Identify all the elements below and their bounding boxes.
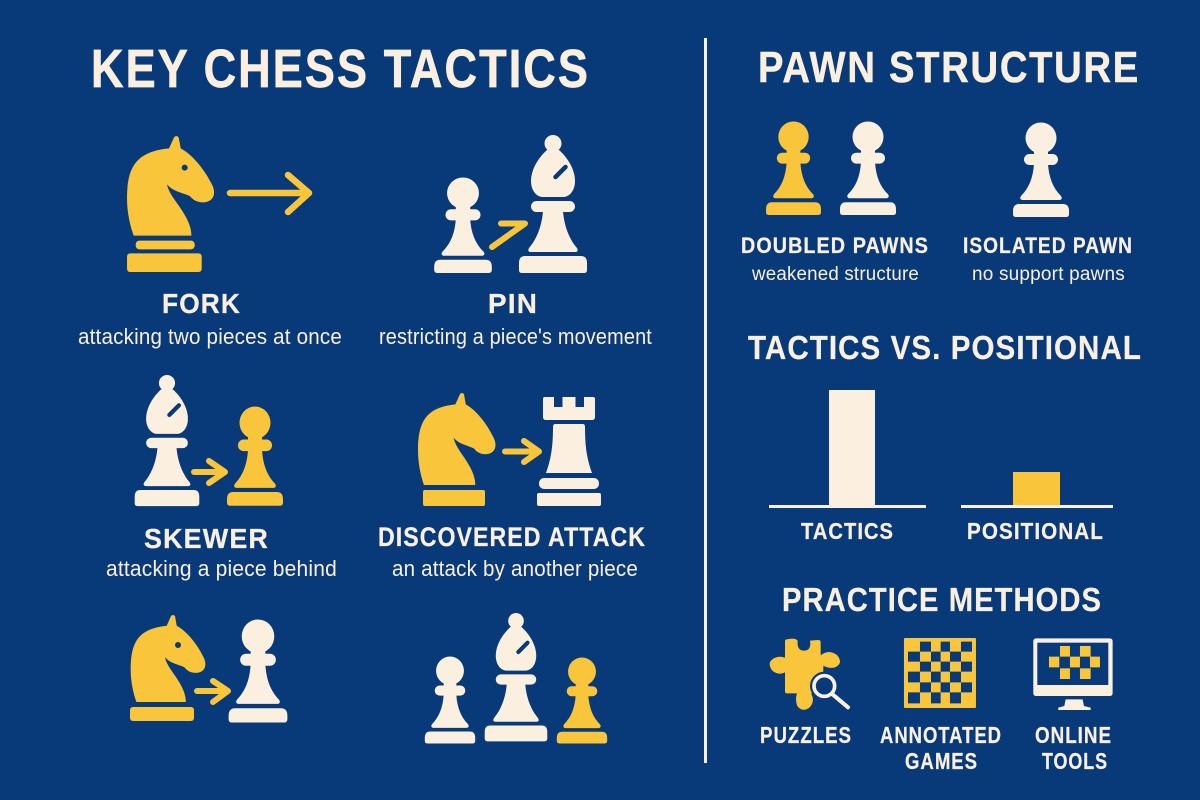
label: online tools: TOOLS <box>1042 748 1108 774</box>
divider <box>704 38 707 763</box>
label: tactics: TACTICS <box>801 518 894 544</box>
panel: skewer <box>106 375 337 581</box>
label: online tools <box>1035 722 1112 774</box>
label: annotated games <box>880 722 1002 774</box>
panel: discovered attack <box>378 393 646 581</box>
heading: doubled pawns: DOUBLED PAWNS <box>741 233 929 258</box>
description: pin: restricting a piece's movement <box>379 324 652 349</box>
label: positional: POSITIONAL <box>967 518 1104 544</box>
icon: knight, arrow and rook <box>418 393 601 506</box>
description: fork: attacking two pieces at once <box>78 324 342 349</box>
panel: puzzles <box>760 639 852 748</box>
bar: positional <box>1013 472 1060 506</box>
icon: knight with arrow <box>127 136 309 272</box>
panel: online tools <box>1033 638 1113 774</box>
panel: doubled pawns <box>741 122 929 285</box>
heading: pawn structure: PAWN STRUCTURE <box>758 43 1140 92</box>
bar: tactics <box>829 390 875 506</box>
description: isolated pawn: no support pawns <box>972 264 1125 285</box>
panel: pin <box>379 135 652 349</box>
heading: discovered attack: DISCOVERED ATTACK <box>378 522 646 552</box>
icon: doubled pawns <box>766 122 896 215</box>
heading: skewer: SKEWER <box>144 523 269 554</box>
panel: annotated games <box>880 638 1002 774</box>
panel: fork <box>78 136 342 349</box>
heading: tactics vs. positional: TACTICS VS. POSITIONAL <box>748 329 1142 366</box>
icon: knight attacking pawn <box>130 615 287 722</box>
icon: bishop, arrow and pawn <box>135 375 283 506</box>
label: annotated games: GAMES <box>905 748 978 774</box>
label: annotated games: ANNOTATED <box>880 722 1002 748</box>
description: doubled pawns: weakened structure <box>751 264 919 285</box>
label: online tools: ONLINE <box>1035 722 1112 748</box>
icon: puzzle piece with magnifier <box>770 639 848 710</box>
heading: fork: FORK <box>162 288 241 319</box>
heading: practice methods: PRACTICE METHODS <box>782 581 1102 618</box>
panel: isolated pawn <box>963 122 1133 285</box>
bar chart: tactics vs positional <box>769 390 1113 544</box>
axis: positional <box>961 505 1113 508</box>
description: discovered attack: an attack by another piece <box>392 556 638 581</box>
title: key chess tactics: KEY CHESS TACTICS <box>91 39 590 99</box>
icon: isolated pawn <box>1013 122 1069 217</box>
icon: pawn, bishop and yellow pawn <box>425 613 607 744</box>
label: puzzles: PUZZLES <box>760 722 852 748</box>
description: skewer: attacking a piece behind <box>106 556 337 581</box>
icon: pawn, arrow and bishop <box>434 135 587 273</box>
icon: computer monitor <box>1033 638 1113 710</box>
axis: tactics <box>769 505 926 508</box>
heading: isolated pawn: ISOLATED PAWN <box>963 233 1133 258</box>
heading: pin: PIN <box>488 288 538 319</box>
icon: chess board <box>904 638 976 708</box>
